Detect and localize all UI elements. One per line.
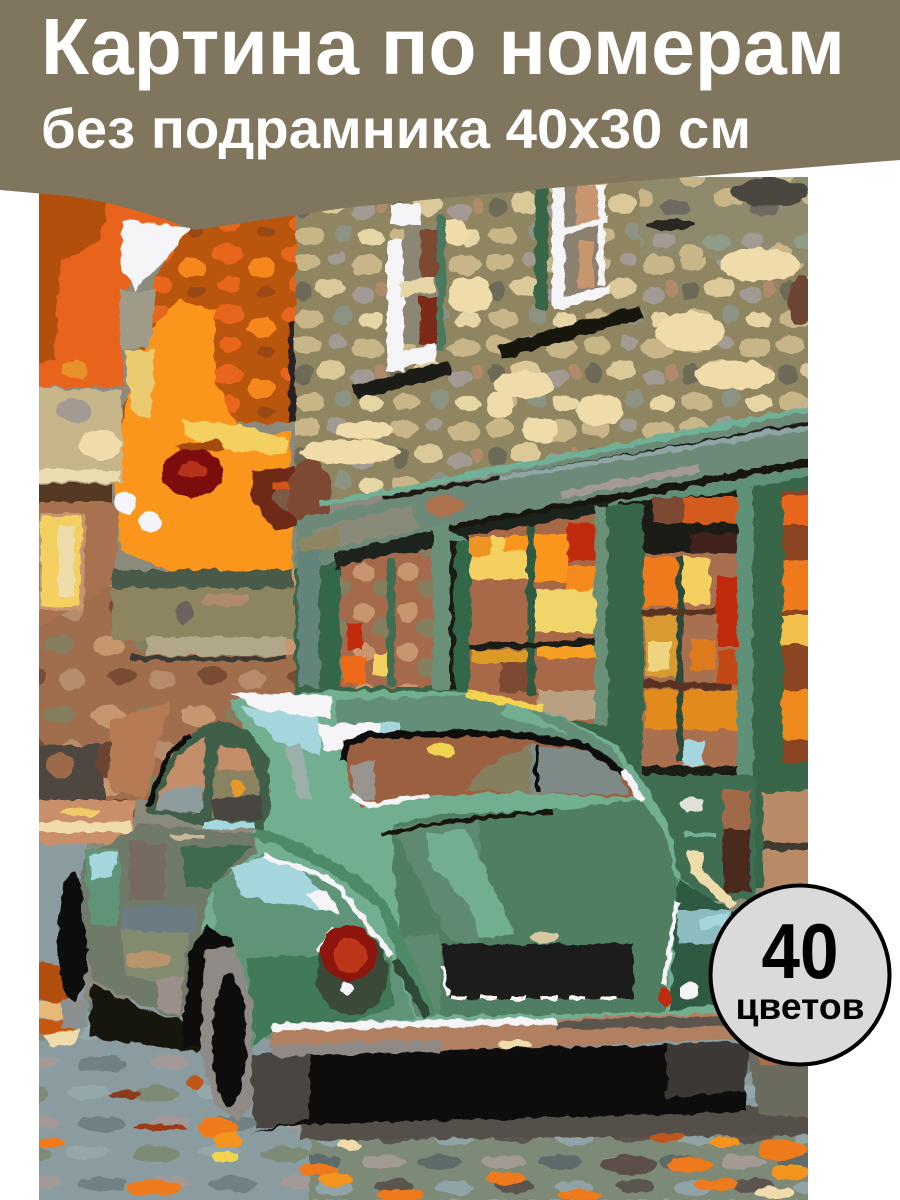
rear fender: [212, 855, 415, 1050]
under car front shadow: [89, 983, 205, 1052]
front body: [82, 823, 256, 1020]
trunk crease: [380, 812, 553, 835]
street: [20, 800, 850, 1200]
shop front base: [293, 476, 808, 792]
stone wall: [293, 180, 808, 500]
tail light: [316, 925, 388, 1015]
fallen leaves: [34, 1076, 810, 1200]
painting: [20, 160, 850, 1200]
car dome: [190, 690, 735, 1040]
brown corner by fascia: [286, 459, 332, 520]
trunk lid: [392, 800, 677, 1016]
left building: [20, 387, 300, 826]
rear window: [344, 733, 642, 808]
wall highlights: [300, 218, 800, 464]
header banner: [0, 0, 900, 230]
autumn tree background: [39, 193, 298, 572]
wall dark top right: [646, 178, 812, 325]
title: Картина по номерам: [41, 2, 845, 91]
license plate: [440, 931, 633, 1000]
side windows: [146, 720, 272, 830]
rear wheel: [182, 925, 310, 1130]
sign disc and lantern: [114, 448, 298, 532]
right side panel: [670, 880, 735, 1012]
roof highlights: [229, 693, 332, 717]
car body: [82, 690, 735, 1050]
bumper: [272, 1012, 745, 1056]
roof band: [335, 695, 630, 775]
front wheel: [58, 872, 88, 1028]
shop windows: [335, 490, 813, 775]
subtitle: без подрамника 40х30 см: [41, 97, 751, 160]
car shadow: [250, 1045, 745, 1135]
badge: 40 colours: цветов: [736, 986, 864, 1027]
badge: 40 colours: [710, 886, 890, 1064]
badge: 40 colours: 40: [762, 907, 838, 995]
upper windows: [355, 185, 640, 392]
shop pillars: [298, 488, 783, 888]
shop fascia: [294, 412, 808, 568]
lower right building and posts: [640, 775, 813, 910]
shoulder band: [256, 832, 432, 1017]
